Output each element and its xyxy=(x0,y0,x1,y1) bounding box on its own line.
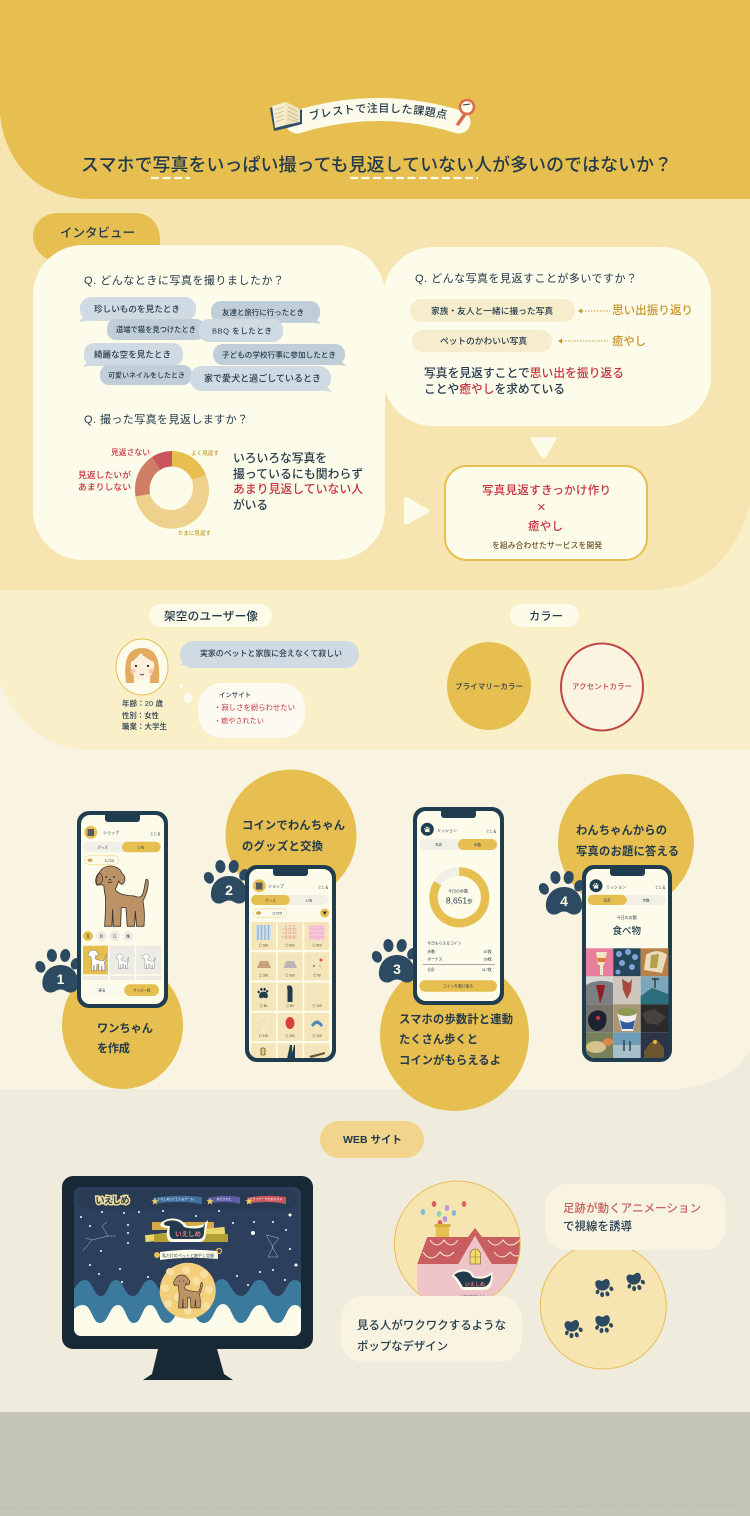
window xyxy=(470,1249,481,1264)
arrow: right triangle xyxy=(404,497,430,525)
monitor frame xyxy=(62,1176,313,1349)
phone 2: goods shop xyxy=(245,865,336,1062)
shop items xyxy=(256,925,325,1059)
donut commentary: がいる xyxy=(233,498,268,512)
background: app section xyxy=(0,650,750,1089)
donut chart xyxy=(135,451,209,529)
phone 3: step counter: ミッション xyxy=(437,828,457,833)
phone 1: dog creation: 目 xyxy=(99,933,103,938)
step 1 paw xyxy=(35,949,80,993)
swatch: primary colour: プライマリーカラー xyxy=(455,682,523,691)
question 3: Q. どんな写真を見返すことが多いですか？ xyxy=(415,271,637,285)
step 1 text: ワンちゃん xyxy=(97,1022,153,1035)
phone 3: step counter: 87枚 xyxy=(484,949,492,954)
phone 2: goods shop: いぬ xyxy=(306,898,313,902)
bubble: footprint animation: 足跡が動くアニメーション xyxy=(563,1201,701,1215)
speech bubbles: photo occasions: BBQ をしたとき xyxy=(212,326,272,336)
circle: paw print animation xyxy=(540,1243,666,1369)
phone 2: goods shop: ◎ 500 xyxy=(259,942,268,948)
arrow: down triangle xyxy=(531,437,556,458)
bubble: pop design: ポップなデザイン xyxy=(357,1339,448,1353)
pill: pet photos: ペットのかわいい写真 xyxy=(440,335,527,346)
phone 4: photo theme: 写真 xyxy=(604,897,611,902)
step 4 paw: 4 xyxy=(560,893,568,909)
background: header xyxy=(0,0,750,199)
conclusion text: ことや癒やしを求めている xyxy=(424,382,565,396)
nav ribbons: あそびかた xyxy=(216,1196,232,1201)
phone 2: goods shop: ◎ 300 xyxy=(285,972,295,978)
donut commentary: いろいろな写真を xyxy=(233,451,327,465)
phone 2: goods shop: ◎ 80 xyxy=(260,1003,268,1008)
logo: dachshund: いえしめ xyxy=(175,1229,202,1238)
phone 3: step counter: とじる xyxy=(486,828,496,834)
phone 4: photo theme: 今日のお題 xyxy=(617,914,637,920)
tagline ribbon xyxy=(154,1248,222,1260)
dog medallion xyxy=(160,1263,216,1319)
title underline accents xyxy=(151,177,478,179)
house body xyxy=(417,1264,516,1296)
phone 2: goods shop: ◎ 500 xyxy=(285,942,295,948)
phone 2: goods shop: 3,725 xyxy=(272,912,282,916)
phone 1: dog creation: 口 xyxy=(113,934,117,938)
question 1: Q. どんなときに写真を撮りましたか？ xyxy=(84,273,284,287)
logo ribbons xyxy=(145,1222,228,1242)
phone 2: goods shop: ◎ 150 xyxy=(285,1033,295,1038)
phone 2: goods shop: ◎ 300 xyxy=(259,972,268,978)
speech bubbles: photo occasions: 珍しいものを見たとき xyxy=(94,304,180,314)
step 2 paw: 2 xyxy=(225,882,233,898)
insight bubble: インサイト xyxy=(219,691,251,699)
bubble: footprint animation: で視線を誘導 xyxy=(563,1219,633,1233)
phone 1: dog creation: 尾 xyxy=(126,934,130,938)
nav ribbons: ★ xyxy=(206,1197,214,1206)
donut labels xyxy=(78,448,219,537)
monitor stand xyxy=(143,1349,233,1380)
photo grid xyxy=(586,948,668,1058)
paw prints xyxy=(563,1272,646,1339)
phone 2: goods shop: ショップ xyxy=(268,882,284,888)
roof xyxy=(417,1228,525,1264)
phone 2: goods shop: ◎ 150 xyxy=(259,1033,268,1038)
phone 2: goods shop: ◎ 50 xyxy=(313,972,321,978)
circle: house illustration xyxy=(394,1180,521,1296)
nav ribbons xyxy=(151,1196,286,1206)
step 2 circle xyxy=(226,770,356,900)
pill: web site heading xyxy=(320,1121,424,1158)
thought dots xyxy=(179,684,192,703)
phone 1: dog creation: 耳 xyxy=(86,933,90,938)
bubble: pop design: 見る人がワクワクするような xyxy=(357,1318,506,1332)
tag: interview: インタビュー xyxy=(60,226,135,240)
nav logo: いえしめ xyxy=(96,1196,130,1206)
conclusion text: 写真を見返すことで思い出を振り返る xyxy=(424,366,624,380)
blue wave xyxy=(74,1279,301,1336)
step 4 text xyxy=(576,824,679,858)
donut labels: 見返さない xyxy=(111,448,150,457)
nav ribbons: ★ xyxy=(245,1197,253,1206)
speech bubbles: photo occasions xyxy=(79,297,346,392)
persona profile: 職業：大学生 xyxy=(122,722,168,731)
step 3 circle xyxy=(380,959,529,1111)
donut labels: たまに見返す xyxy=(178,529,211,537)
phone 3: step counter: 今日もらえるコイン xyxy=(427,940,462,946)
step 3 text: スマホの歩数計と連動 xyxy=(399,1012,513,1026)
step 1 text xyxy=(97,1022,153,1055)
insight bubble: ・癒やされたい xyxy=(214,716,264,725)
phone 1: dog creation: サイズ一覧 xyxy=(133,988,151,992)
step 2 text xyxy=(242,819,345,853)
phone 3: step counter: 写真 xyxy=(435,842,442,847)
phone 2: goods shop: ◎ 500 xyxy=(312,942,322,948)
step 3 paw xyxy=(372,939,417,983)
speech bubbles: photo occasions: 家で愛犬と過ごしているとき xyxy=(204,372,321,384)
bubble: footprint animation xyxy=(545,1184,726,1250)
phone 1: dog creation: いぬ xyxy=(138,846,145,850)
phone 1: dog creation xyxy=(77,811,168,1008)
box: service concept: を組み合わせたサービスを開発 xyxy=(492,540,602,550)
phone 2: goods shop: とじる xyxy=(318,884,328,890)
step 3 paw: 3 xyxy=(393,961,401,977)
donut labels: よく見返す xyxy=(191,449,219,457)
phone 2: goods shop: ◎ 100 xyxy=(312,1003,322,1008)
step 3 text: コインがもらえるよ xyxy=(399,1053,501,1067)
phone 1: dog creation: ショップ xyxy=(103,829,119,835)
step 1 paw: 1 xyxy=(57,971,65,987)
cream wave xyxy=(74,1304,301,1336)
phone 1: dog creation: 3,720 xyxy=(104,859,114,863)
persona profile: 性別：女性 xyxy=(122,711,160,720)
nav ribbons: プラスワークのおもちゃ xyxy=(250,1196,282,1201)
step 2 paw xyxy=(204,860,249,904)
donut commentary: あまり見返していない人 xyxy=(233,482,363,496)
phone 3: step counter: 合計 xyxy=(427,967,435,972)
phone 4: photo theme: ミッション xyxy=(606,884,626,890)
step 3 text xyxy=(399,1012,513,1067)
avatar xyxy=(116,639,168,695)
question 2: Q. 撮った写真を見返しますか？ xyxy=(84,412,248,426)
insight bubble xyxy=(198,683,305,738)
phone 2: goods shop: ◎ 80 xyxy=(286,1003,294,1008)
pill: colour heading xyxy=(510,604,579,627)
phone 3: step counter: コインを受け取る xyxy=(443,984,473,988)
logo: dachshund xyxy=(160,1219,208,1242)
phone 3: step counter: 歩数 xyxy=(427,949,435,954)
phone 1: dog creation: グッズ xyxy=(97,844,108,850)
conclusion text xyxy=(424,366,624,396)
title: スマホで写真をいっぱい撮っても見返していない人が多いのではないか？ xyxy=(81,154,672,175)
phone 4: photo theme: とじる xyxy=(655,884,666,890)
step 2 text: のグッズと交換 xyxy=(242,839,323,853)
circle: house illustration: 柴犬と過ごすほのぼのゲームです！ xyxy=(437,1302,481,1306)
box: service concept: 写真見返すきっかけ作り xyxy=(482,483,611,497)
box: service concept: × xyxy=(537,499,546,516)
house logo: いえしめ xyxy=(465,1281,485,1288)
phone 1: dog creation: とじる xyxy=(150,831,160,836)
phone 4: photo theme: 食べ物 xyxy=(612,925,641,937)
bubble: pop design xyxy=(341,1296,522,1362)
donut commentary: 撮っているにも関わらず xyxy=(233,467,363,481)
pill: persona heading xyxy=(149,604,272,627)
nav ribbons: いえしめってどんなゲーム！ xyxy=(158,1196,196,1201)
phone 3: step counter: ボーナス xyxy=(427,956,443,962)
phone 4: photo theme xyxy=(582,865,672,1062)
website screen xyxy=(74,1187,301,1336)
phone 4: photo theme: 歩数 xyxy=(642,897,650,902)
step 1 circle xyxy=(62,961,183,1089)
pill: pet photos xyxy=(412,330,552,352)
pill: family photos: 家族・友人と一緒に撮った写真 xyxy=(431,305,553,316)
background: persona section xyxy=(0,400,750,750)
speech bubbles: photo occasions: 道端で猫を見つけたとき xyxy=(116,325,196,334)
phone 3: step counter: 今日の歩数 xyxy=(448,888,468,894)
phone 3: step counter: 8,651歩 xyxy=(446,896,473,906)
step 3 text: たくさん歩くと xyxy=(399,1032,478,1046)
tagline ribbon: 私だけのペットと癒やし空間 xyxy=(162,1252,214,1258)
pill: web site heading: WEB サイト xyxy=(343,1134,402,1146)
pill: persona heading: 架空のユーザー像 xyxy=(164,609,258,623)
chimney xyxy=(436,1227,449,1237)
panel: left interview xyxy=(33,245,385,560)
label: memories: 思い出振り返り xyxy=(612,303,693,317)
arrow: memories xyxy=(578,308,610,314)
panel: right interview xyxy=(383,247,711,426)
phone 2: goods shop: ◎ 100 xyxy=(312,1033,322,1038)
phone 3: step counter: 30枚 xyxy=(484,956,492,962)
background: interview section xyxy=(0,100,750,590)
step 1 text: を作成 xyxy=(97,1041,130,1055)
step 2 text: コインでわんちゃん xyxy=(242,819,345,832)
swatch: accent colour xyxy=(561,644,643,730)
circle: house illustration: いやされゲーム！ xyxy=(461,1293,485,1298)
step 4 circle xyxy=(558,774,694,910)
balloons xyxy=(421,1201,466,1226)
step 4 paw xyxy=(539,871,584,915)
insight bubble: ・寂しさを紛らわせたい xyxy=(214,703,295,712)
swatch: accent colour: アクセントカラー xyxy=(572,682,632,691)
gable xyxy=(458,1236,492,1264)
phone 2: goods shop: グッズ xyxy=(265,898,276,902)
background: web section xyxy=(0,1000,750,1412)
monitor mockup xyxy=(62,1176,313,1380)
persona profile xyxy=(122,699,168,731)
stars and constellations xyxy=(80,1210,298,1286)
donut labels: あまりしない xyxy=(78,482,131,492)
pill: family photos xyxy=(410,299,575,322)
tag: interview xyxy=(33,213,160,262)
speech bubbles: photo occasions: 可愛いネイルをしたとき xyxy=(108,370,185,380)
swatch: primary colour xyxy=(447,642,531,730)
phone 3: step counter: 歩数 xyxy=(474,842,481,847)
phone 3: step counter xyxy=(413,807,504,1005)
pill: colour heading: カラー xyxy=(529,610,563,623)
donut commentary xyxy=(233,451,363,512)
label: healing: 癒やし xyxy=(612,334,646,348)
nav ribbons: ★ xyxy=(151,1197,159,1206)
step 4 text: わんちゃんからの xyxy=(576,824,667,837)
box: service concept: 癒やし xyxy=(528,519,563,533)
phone 1: dog creation: 戻る xyxy=(98,988,106,992)
step 4 text: 写真のお題に答える xyxy=(576,844,679,858)
persona bubble xyxy=(179,641,359,668)
speech bubbles: photo occasions: 友達と旅行に行ったとき xyxy=(222,307,304,317)
badge: brainstorm heading: ブレストで注目した課題点 xyxy=(310,102,447,120)
phone 3: step counter: 117枚 xyxy=(482,967,492,972)
speech bubbles: photo occasions: 綺麗な空を見たとき xyxy=(94,350,171,360)
badge: brainstorm heading xyxy=(270,98,476,134)
box: service concept xyxy=(445,466,647,560)
donut labels: 見返したいが xyxy=(78,469,131,480)
persona bubble: 実家のペットと家族に会えなくて寂しい xyxy=(200,648,342,658)
persona profile: 年齢：20 歳 xyxy=(122,699,164,708)
arrow: healing xyxy=(558,338,608,344)
speech bubbles: photo occasions: 子どもの学校行事に参加したとき xyxy=(222,350,336,360)
